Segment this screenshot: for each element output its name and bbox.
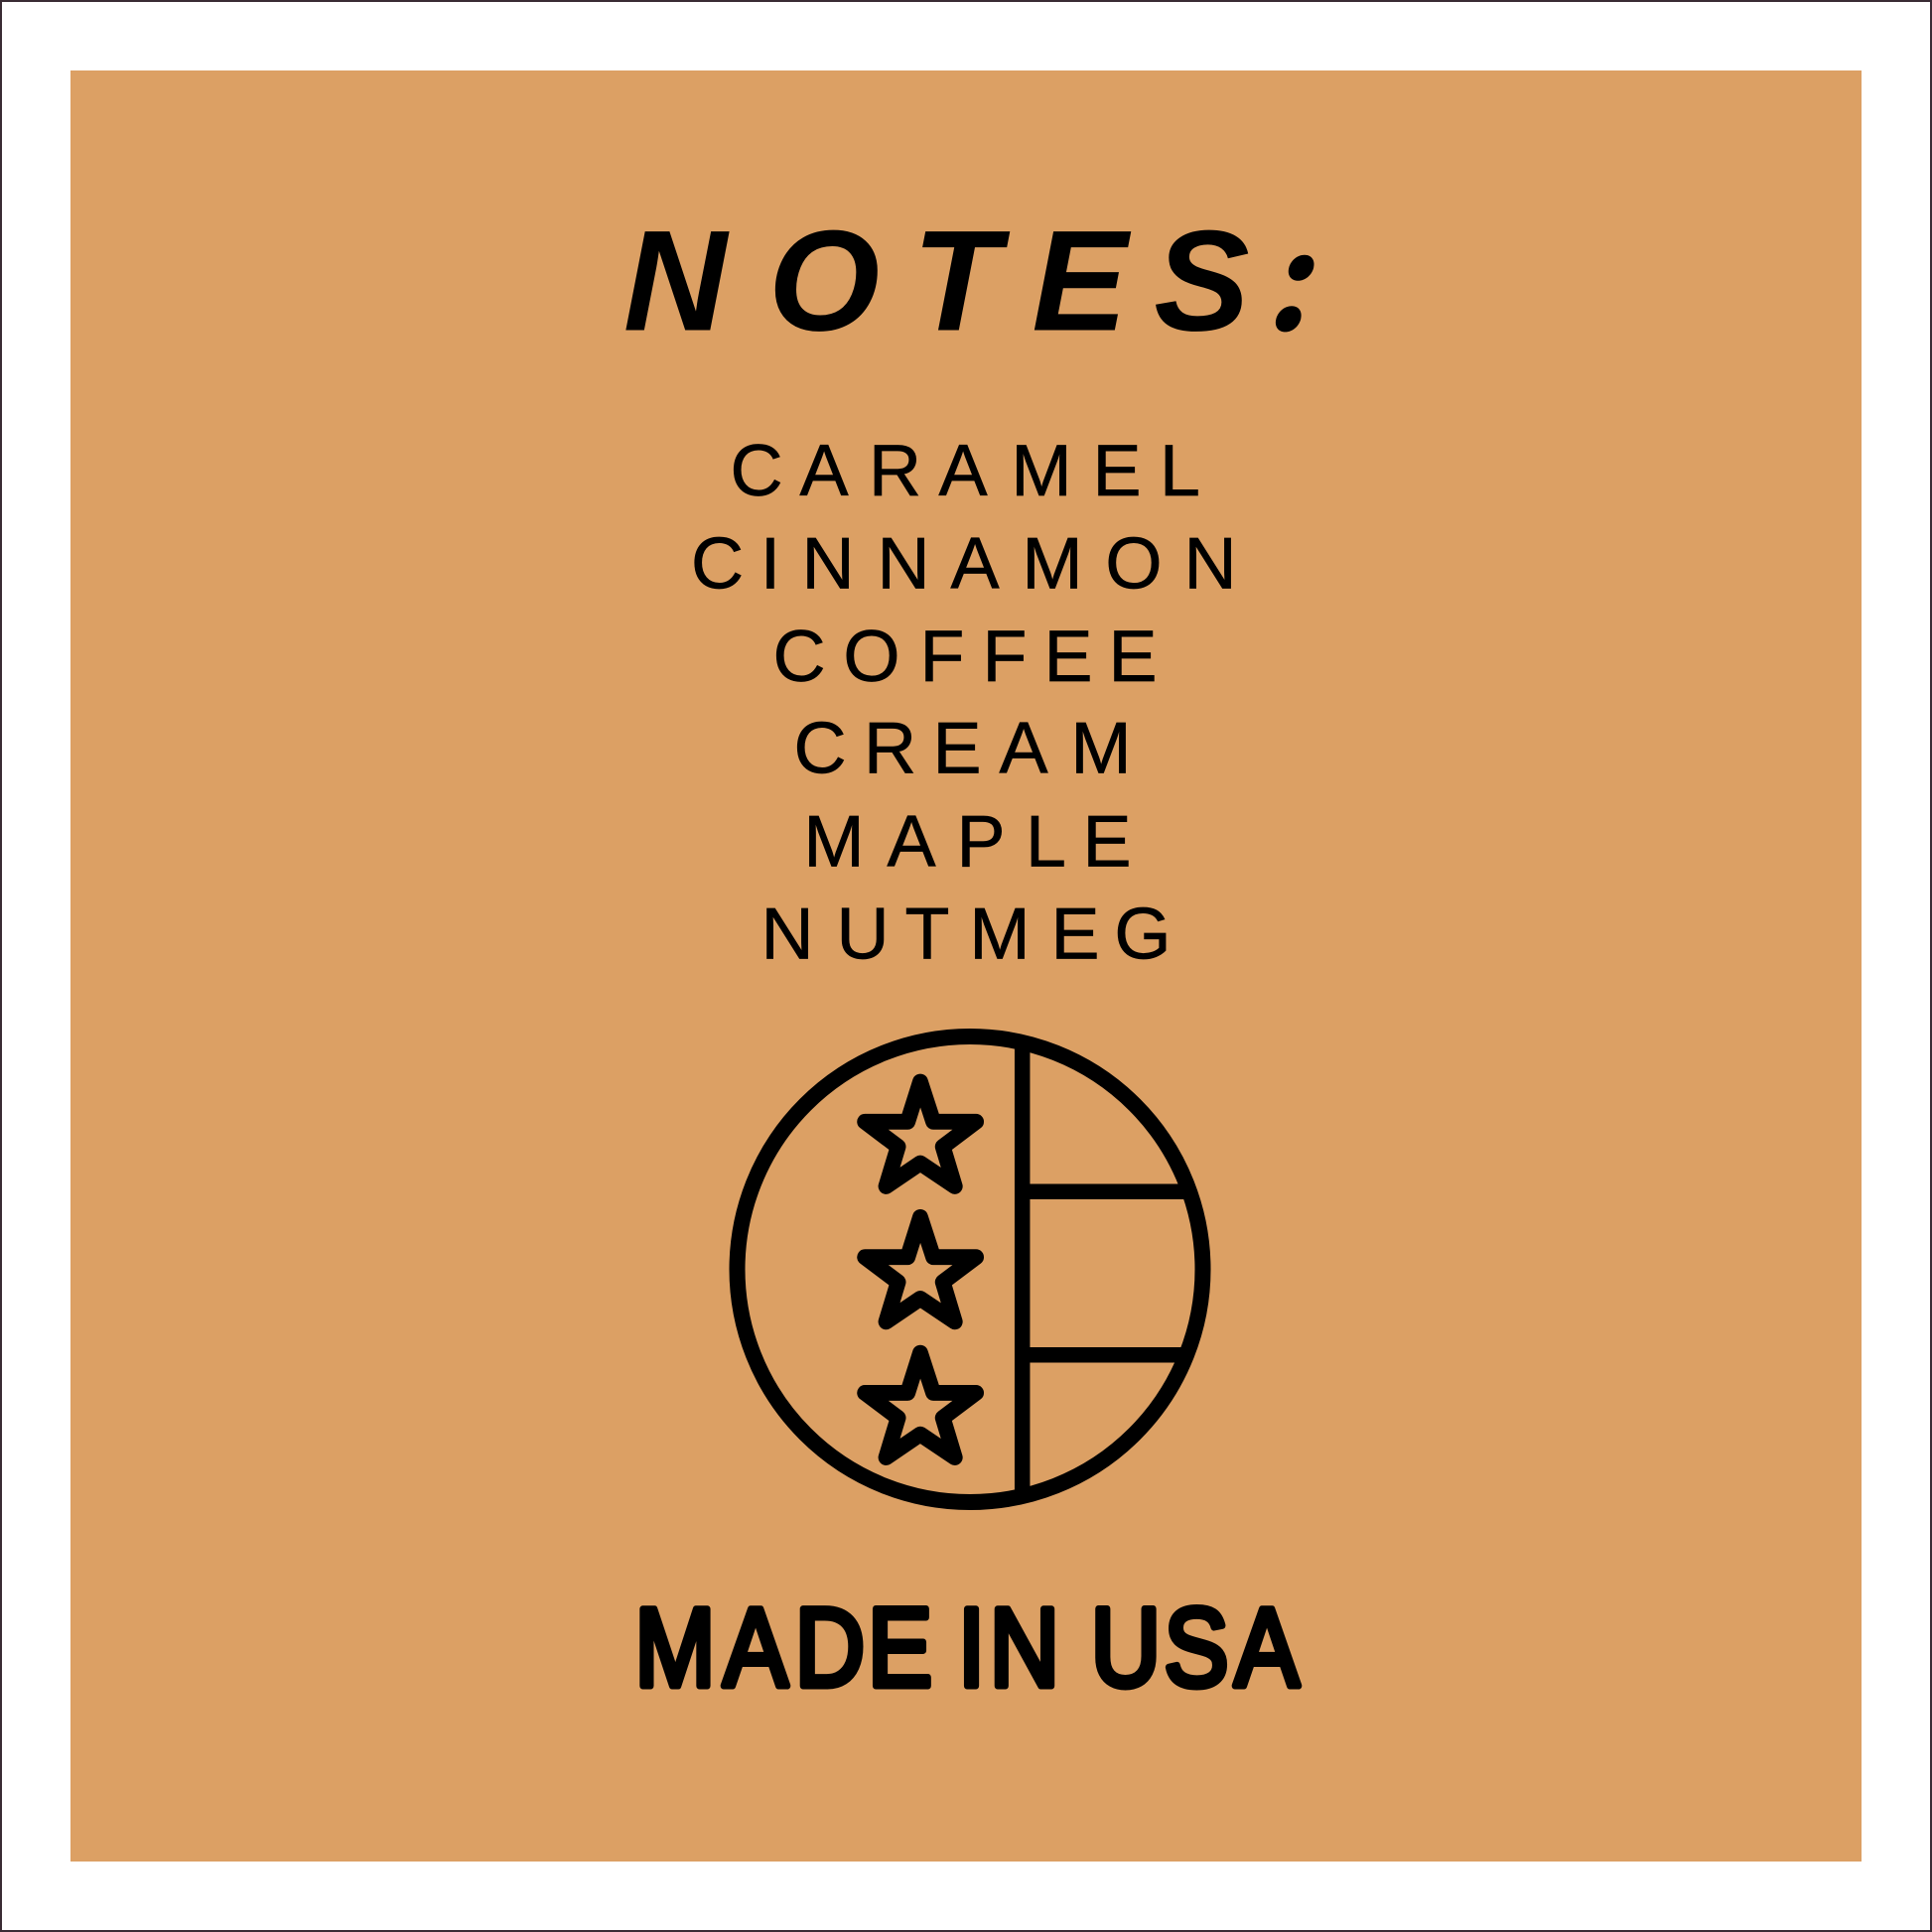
icon: circle outline (737, 1036, 1203, 1502)
list: flavor notes (691, 429, 1237, 975)
icon: upper stripe (1023, 1184, 1189, 1199)
note: caramel: CARAMEL (730, 429, 1200, 511)
title: NOTES (623, 201, 1250, 361)
title: : (1264, 175, 1316, 369)
note: nutmeg: NUTMEG (760, 893, 1172, 975)
icon: bottom star (865, 1353, 976, 1457)
icon: top star (865, 1082, 976, 1186)
icon: vertical bar (1015, 1042, 1030, 1496)
note: maple: MAPLE (803, 799, 1132, 882)
icon: stars (865, 1082, 976, 1457)
footer label: MADE IN USA (634, 1587, 1300, 1711)
icon: middle star (865, 1217, 976, 1321)
note: cream: CREAM (793, 707, 1132, 789)
note: cinnamon: CINNAMON (691, 521, 1237, 604)
icon: round flag with three stars (737, 1036, 1203, 1502)
note: coffee: COFFEE (772, 615, 1158, 697)
icon: lower stripe (1023, 1347, 1189, 1362)
